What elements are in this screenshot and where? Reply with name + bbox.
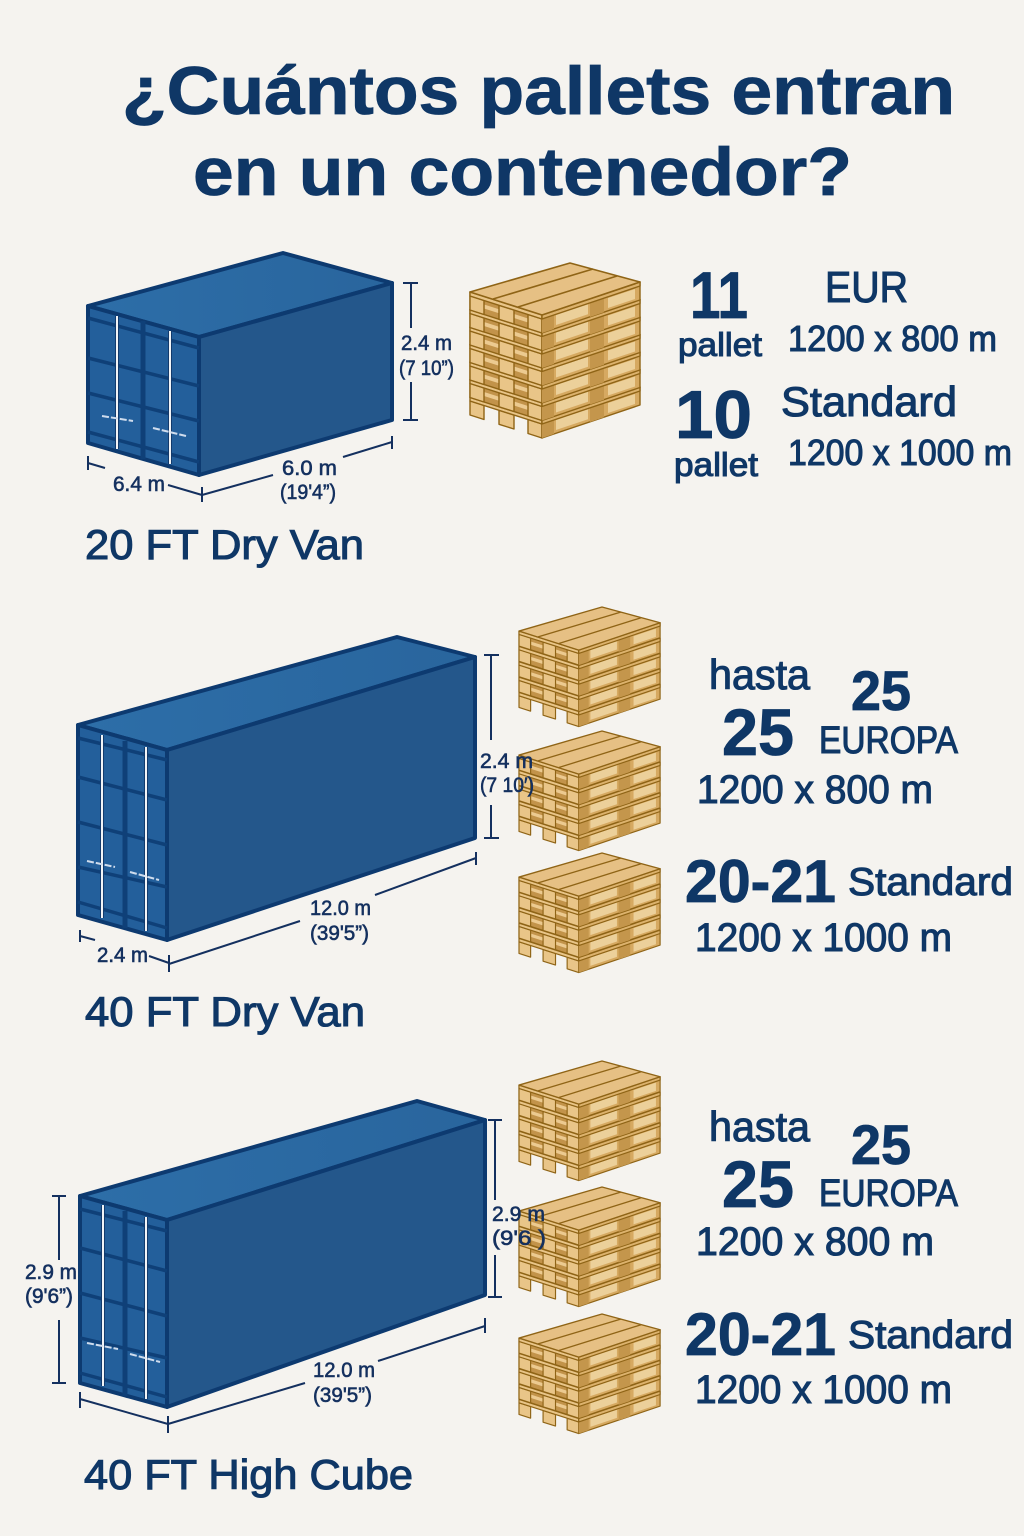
stat: 10 pallet Standard: 1200 x 1000 m [788,432,1012,473]
dimension: left height 2.9 m [25,1196,77,1383]
title: en un contenedor? [193,134,852,210]
stat: 20-21 Standard: 1200 x 1000 m [695,1368,952,1412]
stat: hasta 25 EUROPA [696,1103,959,1264]
panel: 20 FT Dry Van [85,253,1012,568]
stat: 10 pallet Standard: pallet [674,446,758,483]
stat: hasta 25 EUROPA: 1200 x 800 m [696,1220,934,1264]
container: 20 FT [88,253,392,475]
stat: hasta 25 EUROPA: 25 [851,659,911,722]
container: 40 FT High Cube [80,1101,485,1407]
stat: hasta 25 EUROPA: 1200 x 800 m [697,768,933,812]
stat: 20-21 Standard: 1200 x 1000 m [695,916,952,960]
dimension: right height 2.9 m [488,1120,546,1297]
dimension: height 2.4 m [399,283,454,420]
stat: hasta 25 EUROPA: 25 [722,695,794,769]
stat: hasta 25 EUROPA: 25 [722,1147,794,1221]
dimension: width 6.4 m: 6.4 m [113,473,165,496]
pallet stack: bottom [519,1314,660,1434]
stat: 20-21 Standard [685,1301,1013,1412]
dimension: length 12.0 m: 12.0 m [313,1359,375,1382]
dimension: length 12.0 m: (39'5”) [310,922,369,945]
stat: hasta 25 EUROPA: EUROPA [819,1173,959,1215]
dimension: bottom width [80,1392,168,1433]
dimension: length 12.0 m: (39'5”) [313,1384,372,1407]
dimension: length 6.0 m: 6.0 m [282,457,337,480]
stat: hasta 25 EUROPA: EUROPA [819,720,959,762]
dimension: height 2.4 m: (7 10”) [399,357,454,380]
dimension: length 6.0 m: (19'4”) [280,481,336,504]
stat: 20-21 Standard: Standard [848,1314,1013,1357]
title [122,53,955,210]
pallet stack: top [519,607,660,727]
dimension: right height 2.9 m: (9'6 ) [492,1227,546,1250]
dimension: left height 2.9 m: (9'6”) [25,1285,73,1308]
pallet stack: bottom [519,853,660,973]
stat: 20-21 Standard: 20-21 [685,848,836,915]
dimension: height 2.4 m: 2.4 m [480,750,533,773]
pallet stack [470,263,640,438]
dimension: width 6.4 m [88,456,202,502]
panel: 40 FT High Cube [25,1061,1013,1498]
stat: 11 pallet EUR: 11 [690,258,748,332]
dimension: length 12.0 m [169,852,476,964]
dimension: height 2.4 m [480,655,534,838]
stat: hasta 25 EUROPA: 25 [851,1113,911,1176]
stat: hasta 25 EUROPA: hasta [709,651,811,698]
dimension: width 2.4 m [80,930,169,972]
panel: 40 FT Dry Van [78,607,1013,1035]
stat: 20-21 Standard: 20-21 [685,1301,836,1368]
stat: 20-21 Standard: Standard [848,861,1013,904]
stat: 10 pallet Standard [674,377,1012,483]
dimension: right height 2.9 m: 2.9 m [492,1203,545,1226]
stat: 10 pallet Standard: Standard [781,378,957,425]
label: 40 FT Dry Van: 40 FT Dry Van [85,988,365,1035]
container: 40 FT [78,637,475,940]
stat: 11 pallet EUR: 1200 x 800 m [788,318,997,359]
dimension: length 6.0 m [202,436,392,504]
stat: 11 pallet EUR [678,258,997,363]
stat: hasta 25 EUROPA: hasta [709,1103,811,1150]
stat: 10 pallet Standard: 10 [675,377,752,453]
stat: 11 pallet EUR: EUR [825,263,908,312]
dimension: height 2.4 m: 2.4 m [401,332,452,355]
dimension: width 2.4 m: 2.4 m [97,944,148,967]
dimension: height 2.4 m: (7 10′) [480,774,534,797]
stat: 20-21 Standard [685,848,1013,960]
stat: 11 pallet EUR: pallet [678,326,762,363]
dimension: length 12.0 m: 12.0 m [310,897,371,920]
title: ¿Cuántos pallets entran [122,53,955,129]
dimension: length 12.0 m [168,1318,485,1424]
dimension: left height 2.9 m: 2.9 m [25,1261,77,1284]
pallet stack: middle [519,1187,660,1307]
label: 20 FT Dry Van: 20 FT Dry Van [85,521,364,568]
stat: hasta 25 EUROPA [697,651,959,812]
pallet stack: top [519,1061,660,1181]
pallet stack: middle [519,731,660,851]
label: 40 FT High Cube: 40 FT High Cube [84,1451,413,1498]
